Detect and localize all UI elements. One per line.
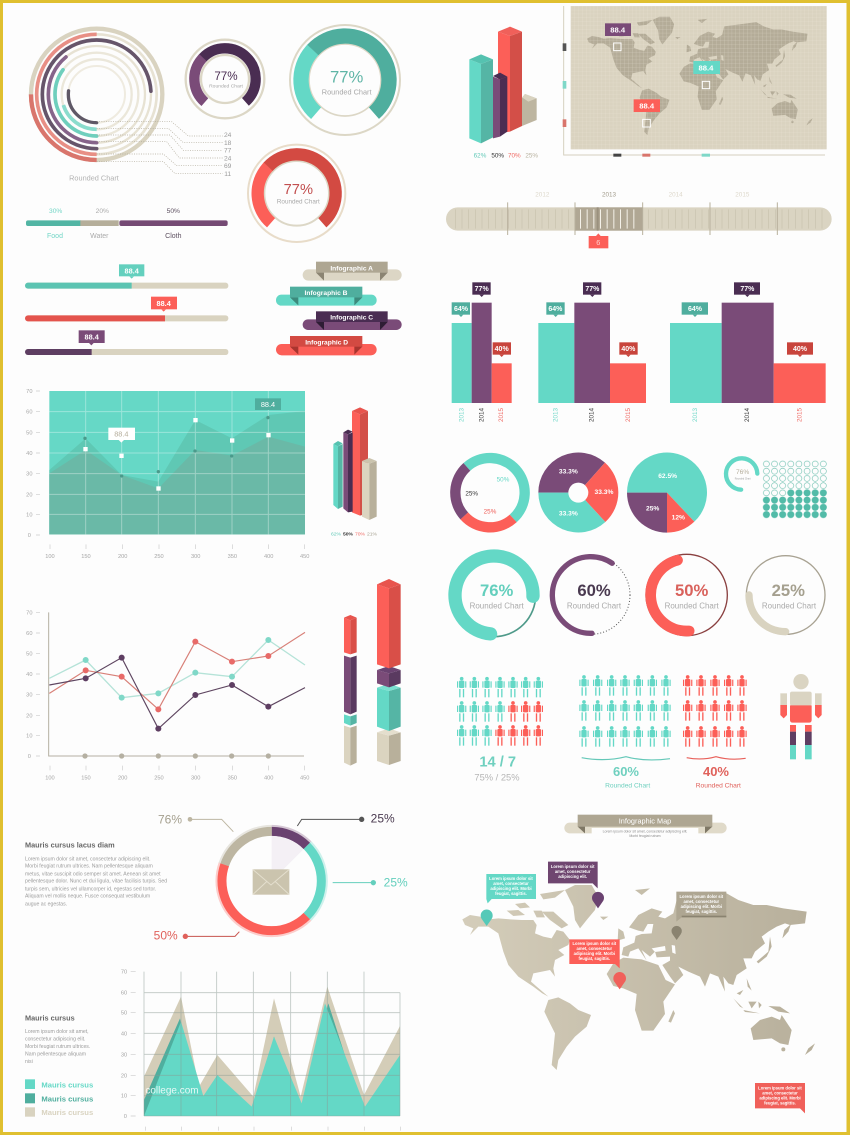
chart: area chart: 60 [26, 410, 32, 416]
values: 24 [224, 155, 232, 162]
gauge: purple 77%: Rounded Chart [209, 83, 244, 89]
paragraph: Morbi feugiat rutrum ultrices. Nam pellentesque aliquam [25, 864, 153, 870]
chart: pie with hole: 33.3% [559, 511, 578, 518]
bar chart: wide: 64% [688, 306, 703, 313]
stacked bar: food water cloth: Cloth [165, 233, 182, 240]
ribbon: infographic B [276, 287, 377, 306]
chart: area chart: 250 [154, 554, 164, 560]
pictogram: 14 of 21 people [457, 677, 543, 782]
ribbon: infographic D: Infographic D [305, 339, 348, 346]
callout: 25% dark [297, 812, 395, 826]
chart: layered peaks: 50 [121, 1011, 127, 1017]
chart: grid world map: 88.4 [610, 26, 626, 35]
callout: red [569, 939, 620, 968]
timeline slider: 2015 [735, 191, 750, 198]
gauge: teal 77% [283, 18, 407, 142]
ring: 50% [646, 554, 727, 636]
stacked bar: food water cloth: 50% [167, 208, 180, 215]
watermark: college.com [145, 1085, 199, 1096]
chart: area chart: 70 [26, 389, 32, 395]
section: top right charts [446, 6, 832, 422]
chart: stacked 3D column narrow [344, 615, 357, 766]
gauge: red 77%: 77% [284, 182, 313, 198]
pictogram: 60% people: 60% [613, 764, 639, 779]
year labels: 2013 [458, 407, 465, 422]
callout: purple: adipiscing elit. [558, 874, 587, 879]
year labels: 2014 [744, 407, 751, 422]
chart: line chart: 40 [26, 672, 32, 678]
values: 24 [224, 132, 232, 139]
chart: 3D bars: 62% [474, 153, 487, 160]
gauge: purple 77%: 77% [214, 70, 238, 83]
paragraph [25, 856, 167, 907]
chart: pie [627, 452, 707, 533]
chart: line chart: 150 [81, 776, 91, 782]
ribbon: infographic C: Infographic C [330, 315, 373, 322]
chart: layered peaks: 60 [121, 991, 127, 997]
chart: area chart [26, 389, 309, 560]
chart: concentric rounded chart [31, 29, 162, 160]
chart: 3D bars small [331, 407, 378, 537]
timeline slider: 6 [596, 238, 600, 247]
timeline slider: 2013 [602, 191, 617, 198]
paragraph: metus, vitae suscipit odio semper sit amet. Aenean sit amet [25, 871, 161, 877]
callout: purple [548, 862, 598, 888]
chart: donut 50 25 25: 25% [484, 509, 497, 516]
callout: red bottom right: adipiscing elit. Morbi [759, 1095, 801, 1100]
chart: area chart: 400 [264, 554, 273, 560]
progress bar: red [25, 297, 228, 321]
bar chart: medium: 40% [621, 346, 636, 353]
timeline slider: 2012 [535, 191, 550, 198]
callout: teal [486, 874, 536, 903]
gauge: red 77%: Rounded Chart [277, 198, 320, 205]
pictogram: 40% people: Rounded Chart [696, 782, 741, 789]
ring: 50%: Rounded Chart [665, 602, 720, 611]
bar chart: wide: 40% [793, 346, 808, 353]
callout: 76% [158, 813, 233, 832]
gauge: teal 77%: 77% [330, 68, 364, 87]
chart: line chart: 20 [26, 713, 32, 719]
chart: small 76% ring: Rounded Chart [735, 477, 751, 480]
ring: 50%: 50% [675, 581, 709, 600]
callout: 25% teal: 25% [384, 876, 408, 890]
section: top left charts [25, 18, 407, 355]
callout: grey: feugiat, sagittis. [686, 909, 717, 914]
heading: Mauris cursus lacus diam: Mauris cursus lacus diam [25, 840, 115, 849]
bar chart: medium [538, 282, 646, 403]
chart: grid world map: 88.4 [639, 102, 655, 111]
ring: 76%: 76% [480, 581, 514, 600]
chart: grid world map: 88.4 [699, 64, 714, 73]
ring: 25% [746, 556, 825, 634]
progress bar: purple: 88.4 [85, 333, 100, 342]
ribbon: infographic B: Infographic B [305, 290, 348, 297]
paragraph: Aliquam vel mollis neque. Fusce consequat vestibulum [25, 894, 150, 900]
chart: dot matrix [762, 460, 827, 518]
chart: 3D bars: 50% [491, 153, 504, 160]
callout: grey: amet, consectetur [684, 899, 719, 904]
ring: 25%: 25% [772, 581, 805, 600]
chart: layered peaks: 40 [121, 1031, 127, 1037]
gauge: teal 77%: Rounded Chart [322, 87, 372, 96]
callout: purple: amet, consectetur [555, 869, 591, 874]
stacked bar: food water cloth: 20% [96, 208, 109, 215]
pictogram: 40% people [683, 675, 747, 789]
chart: 3D bars [469, 27, 538, 160]
stacked bar: food water cloth [26, 208, 228, 240]
leader lines [97, 122, 223, 174]
chart: layered peaks: 70 [121, 970, 127, 976]
chart: pie with hole: 33.3% [595, 489, 614, 496]
chart: layered peaks: 30 [121, 1052, 127, 1058]
bar chart: narrow: 40% [495, 346, 509, 353]
values: 18 [224, 140, 232, 147]
callout: red: amet, consectetur [577, 946, 612, 951]
ring: 60%: 60% [577, 581, 611, 600]
callout: 50% red [154, 928, 239, 942]
callout: red bottom right: amet, consectetur [762, 1090, 798, 1095]
paragraph: augue ac egestas. [25, 901, 67, 907]
chart: grid world map [563, 6, 827, 157]
paragraph: Lorem ipsum dolor sit amet, consectetur adipiscing elit. [25, 856, 151, 862]
heading: Mauris cursus: Mauris cursus [25, 1014, 75, 1023]
paragraph: pellentesque dolor. Nunc et dui ligula, vitae facilisis turpis. Sed [25, 879, 167, 885]
progress bar: purple [25, 330, 228, 355]
chart: area chart: 50 [26, 430, 32, 436]
bar chart: narrow [452, 282, 512, 403]
year labels: 2014 [589, 407, 596, 422]
bar chart: narrow: 77% [475, 286, 489, 293]
year labels: 2015 [797, 407, 804, 422]
paragraph: nisi [25, 1059, 33, 1065]
chart: pie: 62.5% [658, 473, 677, 480]
pictogram: 40% people: 40% [703, 764, 729, 779]
icon: large filled person [780, 674, 822, 759]
callout: red bottom right: Lorem ipsum dolor sit [758, 1085, 802, 1090]
chart: area chart: 350 [228, 554, 237, 560]
chart: 3D bars small: 21% [367, 531, 378, 537]
chart: area chart: 10 [26, 512, 32, 518]
progress bar: teal: 88.4 [125, 266, 140, 275]
chart: pie: 25% [646, 506, 659, 513]
chart: line chart: 50 [26, 651, 32, 657]
stacked bar: food water cloth: Water [90, 233, 109, 240]
ribbon: Infographic Map: Lorem ipsum dolor sit amet, consectetur adipiscing elit. [603, 829, 687, 833]
chart: area chart: 200 [118, 554, 127, 560]
icon: envelope [253, 869, 289, 895]
ribbon: Infographic Map [564, 815, 727, 839]
section: middle right charts [441, 444, 827, 789]
callout: grey: Lorem ipsum dolor sit [680, 894, 724, 899]
ring: 76%: Rounded Chart [470, 602, 525, 611]
callout: red: Lorem ipsum dolor sit [573, 941, 617, 946]
section: bottom right map [462, 815, 815, 1113]
values: 69 [224, 163, 232, 170]
bar chart: medium: 77% [585, 286, 600, 293]
chart: envelope ring [194, 803, 349, 959]
pictogram: 60% people [579, 675, 671, 789]
callout: red: feugiat, sagittis. [579, 956, 610, 961]
paragraph: Lorem ipsum dolor sit amet, [25, 1029, 89, 1035]
legend [25, 1079, 93, 1117]
callout: teal: Lorem ipsum dolor sit [489, 876, 533, 881]
chart: area chart: 150 [81, 554, 91, 560]
chart: line chart: 450 [300, 776, 309, 782]
chart: small 76% ring [725, 458, 758, 490]
chart: donut 50 25 25: 25% [465, 491, 478, 498]
chart: line chart: 300 [191, 776, 200, 782]
year labels [458, 407, 804, 422]
callout: 76%: 76% [158, 813, 182, 827]
callout: red bottom right: feugiat, sagittis. [764, 1100, 796, 1105]
pictogram: 14 of 21 people: 75% / 25% [474, 772, 520, 782]
chart: area chart: 100 [45, 554, 55, 560]
timeline slider [446, 191, 832, 248]
chart: area chart: 88.4 [261, 400, 275, 409]
callout: red bottom right [755, 1083, 805, 1113]
paragraph: turpis sem, ultricies vel ullamcorper id, egestas sed tortor. [25, 886, 156, 892]
chart: line chart: 350 [228, 776, 237, 782]
paragraph: Morbi feugiat rutrum ultrices. [25, 1044, 90, 1050]
ring: 60%: Rounded Chart [567, 602, 622, 611]
chart: 3D bars small: 62% [331, 531, 342, 537]
bar chart: narrow: 64% [454, 306, 469, 313]
chart: donut 50 25 25: 50% [497, 476, 510, 483]
chart: area chart: 88.4 [114, 430, 128, 439]
legend: Mauris cursus [41, 1081, 93, 1090]
chart caption: Rounded Chart [69, 174, 119, 183]
map pin: red [613, 972, 626, 989]
chart: line chart: 60 [26, 631, 32, 637]
chart: line chart [26, 610, 309, 782]
chart: line chart: 30 [26, 693, 32, 699]
callout: 25% teal [333, 876, 408, 890]
legend: Mauris cursus [41, 1108, 93, 1117]
callout: purple: Lorem ipsum dolor sit [551, 864, 595, 869]
year labels: 2015 [625, 407, 632, 422]
map pin: purple [592, 892, 604, 908]
year labels: 2013 [692, 407, 699, 422]
chart: pie: 12% [672, 515, 685, 522]
chart: layered peaks: 0 [124, 1114, 127, 1120]
chart: area chart: 40 [26, 451, 32, 457]
chart: stacked 3D column wide [377, 579, 401, 765]
chart: small 76% ring: 76% [736, 469, 749, 476]
map pin: grey [671, 926, 682, 940]
ribbon: infographic C [303, 311, 402, 330]
chart: area chart: 450 [300, 554, 309, 560]
bar chart: medium: 64% [548, 306, 563, 313]
ring: 60% [551, 555, 630, 635]
pictogram: 60% people: Rounded Chart [605, 782, 650, 789]
year labels: 2013 [552, 407, 559, 422]
chart: line chart: 70 [26, 610, 32, 616]
stacked bar: food water cloth: 30% [49, 208, 62, 215]
values [224, 132, 232, 178]
section: middle left charts [26, 389, 401, 782]
gauge: purple 77% [182, 36, 268, 122]
ribbon: infographic D [276, 336, 377, 355]
year labels: 2015 [498, 407, 505, 422]
chart: line chart: 200 [118, 776, 127, 782]
bar chart: wide [670, 282, 826, 403]
chart: 3D bars: 25% [525, 153, 538, 160]
chart: pie with hole [538, 452, 618, 532]
paragraph: consectetur adipiscing elit. [25, 1036, 85, 1042]
timeline slider: 2014 [669, 191, 683, 198]
values: 11 [224, 171, 231, 178]
gauge: red 77% [242, 138, 352, 248]
chart: line chart: 250 [154, 776, 164, 782]
ring: 25%: Rounded Chart [762, 602, 817, 611]
chart: line chart: 100 [45, 776, 55, 782]
values: 77 [224, 148, 232, 155]
chart: area chart: 20 [26, 492, 32, 498]
section: bottom left [25, 803, 408, 1131]
chart: layered peaks: 20 [121, 1073, 127, 1079]
map pin: teal [481, 910, 493, 926]
callout: teal: adipiscing elit. Morbi [490, 886, 532, 891]
callout: grey: adipiscing elit. Morbi [681, 904, 722, 909]
world map [462, 885, 815, 1070]
chart: area chart: 0 [28, 533, 31, 539]
ribbon: infographic A: Infographic A [330, 265, 373, 272]
chart: donut 50 25 25 [441, 444, 539, 542]
chart: pie with hole: 33.3% [559, 468, 578, 475]
progress bar: red: 88.4 [157, 299, 172, 308]
paragraph: Nam pellentesque aliquam [25, 1051, 86, 1057]
legend: Mauris cursus [41, 1095, 93, 1104]
chart: layered peaks [121, 970, 400, 1131]
chart: line chart: 400 [264, 776, 273, 782]
stacked bar: food water cloth: Food [47, 233, 63, 240]
year labels: 2014 [478, 407, 485, 422]
ribbon: Infographic Map: Morbi feugiat rutrum [629, 834, 661, 838]
callout: teal: amet, consectetur [493, 881, 529, 886]
callout: 25% dark: 25% [371, 812, 395, 826]
chart: 3D bars small: 50% [343, 531, 354, 537]
callout: teal: feugiat, sagittis. [495, 891, 527, 896]
callout: 50% red: 50% [154, 928, 178, 942]
chart: area chart: 300 [191, 554, 200, 560]
chart: line chart: 10 [26, 734, 32, 740]
callout: red: adipiscing elit. Morbi [574, 951, 615, 956]
ribbon: Infographic Map: Infographic Map [619, 816, 671, 825]
ring: 76% [452, 553, 536, 637]
callout: grey [676, 892, 726, 922]
progress bar: teal [25, 264, 228, 289]
paragraph [25, 1029, 90, 1065]
chart: area chart: 30 [26, 472, 32, 478]
chart: line chart: 0 [28, 754, 31, 760]
ribbon: infographic A [303, 262, 402, 281]
chart: 3D bars: 70% [508, 153, 521, 160]
pictogram: 14 of 21 people: 14 / 7 [479, 755, 516, 771]
chart: layered peaks: 10 [121, 1094, 127, 1100]
chart: 3D bars small: 70% [355, 531, 366, 537]
bar chart: wide: 77% [740, 286, 755, 293]
